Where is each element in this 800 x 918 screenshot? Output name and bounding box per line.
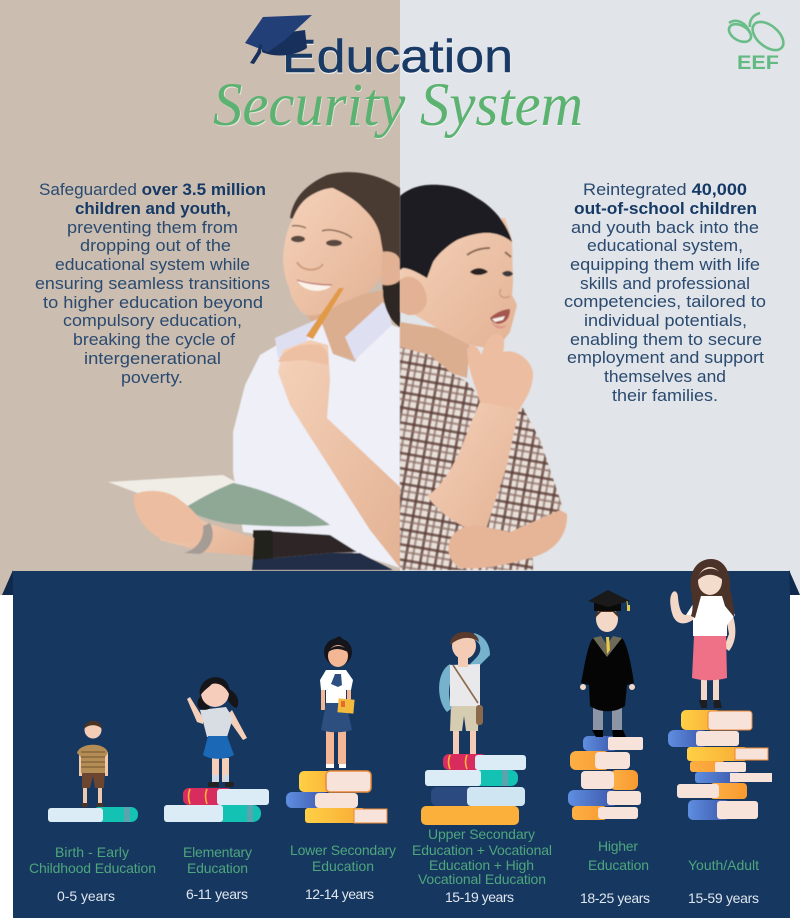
stage 4: upper secondary and vocational: Vocational Education [418,871,546,887]
title: Security System: Security System [214,73,583,140]
stage 3: lower secondary [286,636,396,902]
text block: left achievement [35,180,270,387]
text block: left achievement: children and youth, [75,199,231,218]
book stack 6 [668,710,772,820]
text block: left achievement: compulsory education, [63,311,242,330]
logo wordmark: EEF [737,53,779,74]
background: left beige half [0,0,400,595]
stage 4: upper secondary and vocational [412,632,552,905]
text block: left achievement: Safeguarded over 3.5 million [39,180,266,199]
text block: left achievement: ensuring seamless transitions [35,274,270,293]
boy lower arm and hand [448,510,567,568]
label: Elementary [183,844,252,860]
text block: right achievement: out-of-school children [574,199,757,218]
text block: right achievement: educational system, [587,236,743,255]
text block: right achievement: skills and professional [580,274,750,293]
text block: left achievement: intergenerational [84,349,221,368]
title: Education: Education [282,31,513,83]
open book white pages [108,475,236,510]
girl collar [275,302,392,360]
text block: left achievement: preventing them from [67,218,238,237]
age: 12-14 years [305,886,374,902]
logo: EEF [726,13,789,74]
title [213,30,583,140]
girl ear [381,252,400,285]
stage 1: birth to early childhood [29,721,156,904]
boy eyes, mouth, eyebrows [467,248,513,329]
book stack 2 [164,788,269,822]
label: Lower Secondary [290,842,396,858]
background: right grey half [400,0,800,595]
stage 6: youth and adult [668,559,772,906]
girl lower hair [383,283,400,327]
pencil [306,288,344,339]
title: Education [282,30,513,82]
text block: left achievement: poverty. [121,368,183,387]
book stack 1 [48,807,138,822]
age: 15-19 years [445,889,514,905]
text block: right achievement: themselves and [604,367,726,386]
boy hair [400,185,512,278]
photo: student girl with book [108,172,400,570]
book stack 4 [421,754,526,825]
figure: upper secondary boy [439,632,490,754]
open book green cover [183,483,330,527]
girl hair back [290,172,400,327]
girl belt [253,530,357,560]
girl hand holding book [134,491,208,543]
figure: graduate [580,590,635,737]
age: 18-25 years [580,890,650,906]
girl eyes, nose and smile [291,226,352,291]
stage 2: elementary: Education [187,860,248,876]
icon: graduation cap [245,15,312,64]
figure: lower secondary girl [320,636,355,768]
age: 15-59 years [688,890,759,906]
stage 4: upper secondary and vocational: Education + Vocational [412,842,552,858]
boy face [400,218,517,348]
text block: right achievement: equipping them with life [570,255,760,274]
age: 6-11 years [186,886,248,902]
panel: navy stages background [2,570,800,918]
label: Birth - Early [55,844,129,860]
text block: right achievement: enabling them to secure [570,330,762,349]
wristwatch [184,523,213,554]
text block: right achievement: employment and support [567,348,764,367]
book stack 5 [568,736,643,820]
text block: right achievement: competencies, tailored to [564,292,766,311]
boy shirt [400,347,563,570]
stage 1: birth to early childhood: Childhood Education [29,860,156,876]
girl forearm and raised hand [278,340,400,568]
title: Security System [213,72,583,139]
text block: right achievement: Reintegrated 40,000 [583,180,747,199]
girl lower arm [160,500,254,556]
text block: right achievement: and youth back into the [571,218,759,237]
photo: boy thinking [400,185,567,570]
age: 0-5 years [57,888,115,904]
text block: right achievement: individual potentials, [584,311,747,330]
stage 5: higher education: Education [588,857,649,873]
girl shirt [233,302,400,568]
label: Upper Secondary [428,826,535,842]
girl neck [307,290,388,360]
book stack 3 [286,771,387,823]
figure: elementary girl [187,677,247,787]
girl trousers [252,553,393,570]
label: Higher [598,838,638,854]
stage 5: higher education [568,590,650,906]
boy hand on chin [467,334,533,410]
text block: left achievement: to higher education beyond [43,293,263,312]
figure: young woman [670,559,735,708]
text block: left achievement: breaking the cycle of [73,330,235,349]
boy neck [400,322,470,378]
figure: toddler boy [77,721,108,807]
text block: right achievement: their families. [612,386,718,405]
text block: left achievement: educational system while [55,255,250,274]
stage 2: elementary [164,677,269,902]
boy ear [400,277,427,315]
logo butterfly mark [726,13,789,56]
text block: left achievement: dropping out of the [80,236,231,255]
text block: right achievement [564,180,766,405]
stage 3: lower secondary: Education [312,858,374,874]
label: Youth/Adult [688,857,759,873]
girl face [283,188,384,315]
boy arm bent [427,395,520,532]
stage 4: upper secondary and vocational: Education + High [429,857,534,873]
